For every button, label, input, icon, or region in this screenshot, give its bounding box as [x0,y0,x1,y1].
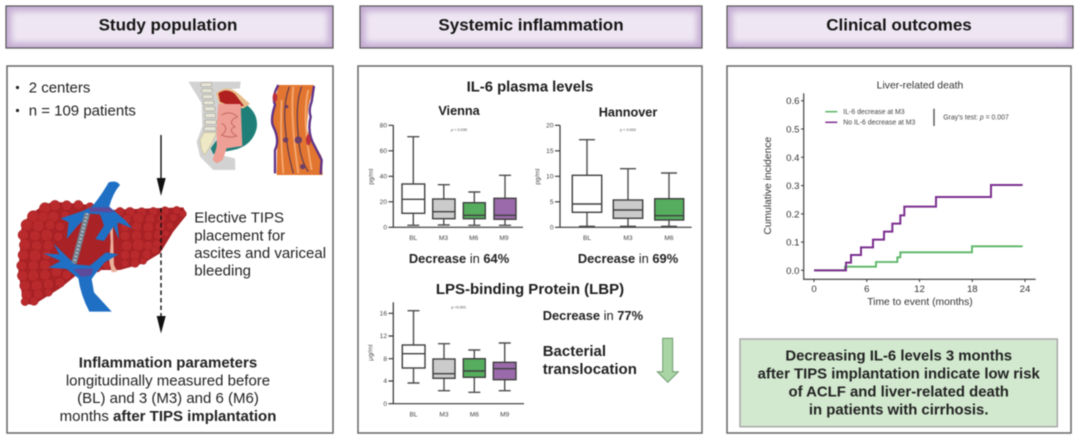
text: elective TIPS: bleeding [194,262,251,280]
chart axes: 12 [914,284,925,295]
chart: liver-related death cumulative incidence [763,80,1036,308]
box plot: Vienna: 60 [380,148,387,155]
text: LBP decrease: Decrease in 77% [543,308,644,323]
box plot: Vienna: 0 [383,224,387,232]
heading: IL-6 plasma levels: IL-6 plasma levels [467,80,593,96]
legend [825,109,1009,127]
chart axes: Cumulative incidence [763,136,774,235]
legend: IL-6 decrease at M3 [843,109,905,116]
box plot: Vienna: p = 0.035 [451,128,467,132]
chart axes: 0.1 [786,238,800,249]
box plot: LBP: μg/ml [368,344,374,361]
box plot: Hannover: M6 [664,235,674,242]
text: inflammation parameters: months after TIPS implantation [60,408,276,425]
chart axes [763,93,1036,308]
box plot: Hannover: 5 [550,199,554,206]
chart axes: 0.0 [786,266,800,277]
box plot: Hannover: 0 [550,224,554,232]
box plot: Vienna: 40 [380,174,387,180]
panel: systemic inflammation [358,66,702,433]
box plot: LBP: M6 [470,412,479,418]
box plot: Hannover: 10 [546,174,554,180]
bullet list: centers and patients [16,80,136,120]
box plot: LBP [368,302,524,418]
box plot: LBP: M3 [439,412,449,418]
header: study population: Study population [99,16,237,34]
text: bacterial translocation: translocation [543,361,637,378]
chart axes: 0.2 [786,209,800,220]
box plot: LBP: M9 [500,412,510,418]
callout: conclusion: of ACLF and liver-related death [789,385,1009,401]
callout: conclusion: in patients with cirrhosis. [809,402,988,418]
box plot: Hannover: p = 0.002 [620,128,636,132]
chart heading: Vienna: Vienna [438,104,481,118]
box plot: Vienna: 80 [380,122,387,130]
text: bacterial translocation: Bacterial [543,343,606,360]
chart axes: 18 [967,284,978,295]
callout: conclusion [740,339,1057,427]
box plot: Hannover: BL [583,235,591,242]
box plot: LBP: 0 [383,401,387,408]
box plot: Vienna: BL [409,235,418,242]
curve: no IL-6 decrease [814,185,1023,270]
text: inflammation parameters: Inflammation parameters [79,354,257,372]
header: study population [6,6,333,48]
header: systemic inflammation [360,6,702,48]
chart axes: Time to event (months) [867,297,973,308]
panel: study population [7,66,333,433]
chart axes: 0.4 [786,153,800,164]
box plot: Vienna: M6 [469,235,479,242]
arrow: green down [657,338,678,382]
arrow: dashed down [157,208,166,334]
text: elective TIPS: placement for [194,227,285,244]
bullet list: centers and patients: 2 centers [29,80,90,96]
chart axes: 0.3 [786,181,800,192]
header: systemic inflammation: Systemic inflammation [438,16,624,34]
panel: clinical outcomes [727,66,1071,433]
callout: conclusion: Decreasing IL-6 levels 3 months [785,349,1012,365]
legend: No IL-6 decrease at M3 [843,120,915,127]
text: elective TIPS [194,210,326,280]
text: inflammation parameters: (BL) and 3 (M3) and 6 (M6) [77,390,259,407]
chart axes: 24 [1020,284,1031,295]
text: Vienna decrease: Decrease in 64% [409,251,510,266]
box plot: LBP: 4 [383,378,387,385]
chart axes: 6 [864,284,869,295]
heading: LPS-binding protein: LPS-binding Protein (LBP) [436,281,624,298]
text: Hannover decrease: Decrease in 69% [578,251,679,266]
icon: esophageal varices [272,85,323,175]
box plot: LBP: p =0.001 [451,306,466,310]
box plot: Vienna [368,122,523,242]
box plot: Hannover: 20 [546,122,554,130]
text: inflammation parameters [60,354,276,425]
box plot: LBP: 16 [380,310,387,318]
chart title: Liver-related death [877,80,964,92]
box plot: Vienna: M9 [499,235,509,242]
box plot: Hannover: 15 [546,148,554,155]
text: inflammation parameters: longitudinally measured before [66,372,270,390]
curve: IL-6 decrease [814,246,1023,270]
box plot: LBP: BL [409,412,418,418]
callout: conclusion: after TIPS implantation indicate low risk [758,366,1040,382]
legend: Gray's test: p = 0.007 [943,114,1009,122]
box plot: LBP: 8 [383,356,387,363]
chart axes: 0 [811,284,817,295]
chart heading: Hannover: Hannover [599,106,657,120]
text: bacterial translocation [543,343,637,378]
box plot: Vienna: 20 [380,199,387,206]
box plot: Hannover [534,122,692,242]
box plot: Vienna: pg/ml [368,168,375,185]
box plot: Hannover: M3 [623,235,633,242]
chart axes: 0.6 [786,96,800,107]
arrow: solid down [157,135,166,196]
icon: ascites abdomen [188,82,257,170]
header: clinical outcomes [727,6,1073,48]
text: elective TIPS: ascites and variceal [194,245,326,262]
box plot: LBP: 12 [380,333,387,340]
bullet list: centers and patients: n = 109 patients [29,102,136,120]
header: clinical outcomes: Clinical outcomes [826,16,972,34]
chart axes: 0.5 [786,124,800,136]
box plot: Vienna: M3 [439,235,448,242]
text: elective TIPS: Elective TIPS [194,210,284,227]
icon: cirrhotic liver with TIPS stent [17,181,187,312]
box plot: Hannover: pg/ml [534,168,542,185]
